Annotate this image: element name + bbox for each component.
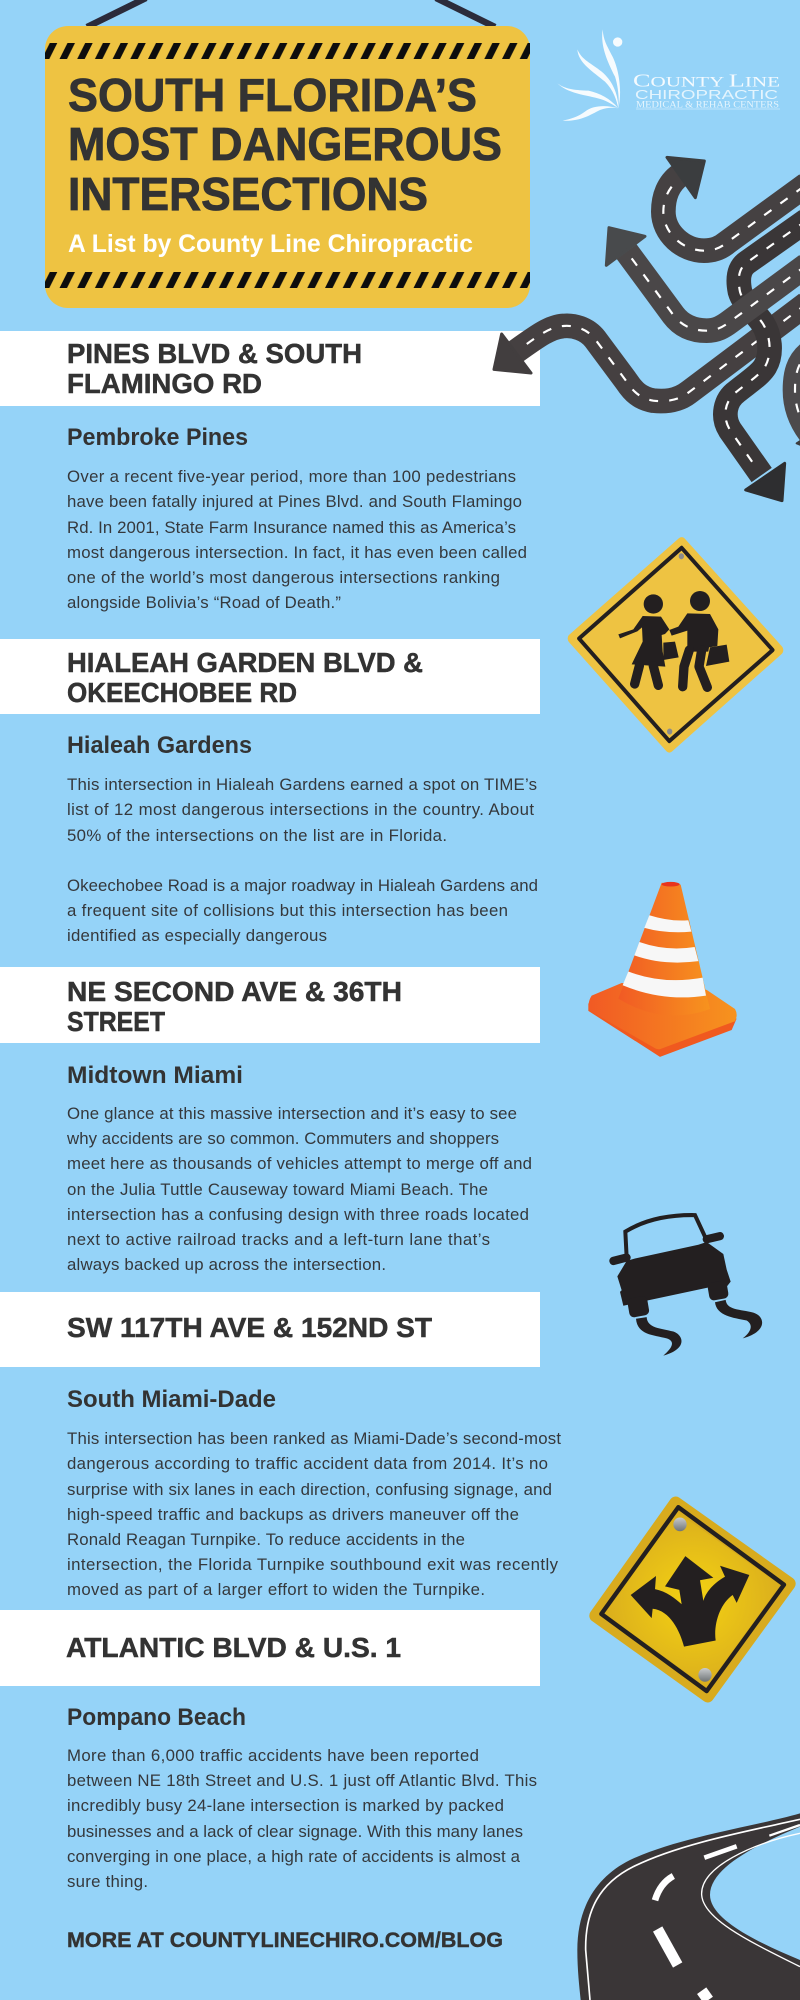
body text: have been fatally injured at Pines Blvd. and South Flamingo: [67, 492, 522, 511]
body text: intersection, the Florida Turnpike southbound exit was recently: [67, 1555, 559, 1574]
call to action: MORE AT COUNTYLINECHIRO.COM/BLOG: [67, 1928, 503, 1952]
icon: three-way arrow sign: [596, 1503, 789, 1696]
body text: sure thing.: [67, 1872, 148, 1891]
body text: [67, 1746, 537, 1891]
title: [68, 69, 502, 220]
road to far right: [795, 350, 800, 446]
body text: list of 12 most dangerous intersections in the country. About: [67, 800, 534, 819]
road with down arrow: [725, 220, 800, 501]
body text: dangerous according to traffic accident data from 2014. It’s no: [67, 1454, 548, 1473]
heading band: [0, 1610, 540, 1686]
logo: County Line Chiropractic: C OUNTY L INE: [633, 71, 780, 91]
body text: why accidents are so common. Commuters and shoppers: [66, 1129, 499, 1148]
road with left arrow: [494, 304, 800, 401]
heading band: [0, 967, 540, 1043]
city: Midtown Miami: [67, 1062, 243, 1089]
hanging sign straps: [87, 0, 495, 27]
icon: traffic cone: [588, 882, 737, 1057]
body text: identified as especially dangerous: [67, 926, 327, 945]
body text: businesses and a lack of clear signage. With this many lanes: [67, 1822, 523, 1841]
section 1: Pines Blvd: [0, 331, 540, 612]
body text: [67, 467, 527, 612]
heading: FLAMINGO RD: [67, 368, 262, 399]
heading: OKEECHOBEE RD: [67, 677, 297, 708]
body text: 50% of the intersections on the list are in Florida.: [67, 826, 447, 845]
body text: always backed up across the intersection.: [67, 1255, 386, 1274]
subtitle: A List by County Line Chiropractic: [68, 230, 473, 258]
title sign: [45, 26, 530, 308]
body text: Ronald Reagan Turnpike. To reduce accidents in the: [67, 1530, 465, 1549]
heading: ATLANTIC BLVD & U.S. 1: [66, 1632, 401, 1663]
body text: Over a recent five-year period, more than 100 pedestrians: [67, 467, 516, 486]
icon: school crossing sign: [572, 542, 779, 748]
title: MOST DANGEROUS: [68, 118, 502, 170]
body text: More than 6,000 traffic accidents have been reported: [67, 1746, 479, 1765]
logo: County Line Chiropractic: CHIROPRACTIC: [635, 88, 778, 102]
body text: a frequent site of collisions but this intersection has been: [67, 901, 508, 920]
body text: alongside Bolivia’s “Road of Death.”: [67, 593, 341, 612]
body text: high-speed traffic and backups as drivers maneuver off the: [67, 1505, 519, 1524]
body text: between NE 18th Street and U.S. 1 just off Atlantic Blvd. This: [67, 1771, 537, 1790]
title: SOUTH FLORIDA’S: [68, 69, 477, 121]
road with U-turn arrow: [663, 157, 800, 251]
heading: NE SECOND AVE & 36TH: [67, 976, 402, 1007]
section 5: Pompano Beach: [0, 1610, 540, 1891]
city: Pompano Beach: [67, 1704, 246, 1731]
body text: most dangerous intersection. In fact, it has even been called: [67, 543, 527, 562]
heading: STREET: [67, 1006, 165, 1037]
city: Hialeah Gardens: [67, 732, 252, 759]
heading: PINES BLVD & SOUTH: [67, 338, 362, 369]
body text: converging in one place, a high rate of accidents is almost a: [67, 1847, 521, 1866]
body text: This intersection in Hialeah Gardens earned a spot on TIME’s: [67, 775, 537, 794]
heading band: [0, 1292, 540, 1367]
body text: [67, 775, 538, 945]
body text: surprise with six lanes in each direction, confusing signage, and: [67, 1480, 552, 1499]
body text: incredibly busy 24-lane intersection is marked by packed: [67, 1796, 504, 1815]
heading: [67, 338, 362, 399]
body text: one of the world’s most dangerous intersections ranking: [67, 568, 500, 587]
logo: County Line Chiropractic: MEDICAL & REHAB CENTERS: [636, 99, 779, 109]
body text: intersection has a confusing design with three roads located: [67, 1205, 529, 1224]
body text: One glance at this massive intersection and it’s easy to see: [67, 1104, 517, 1123]
city: Pembroke Pines: [67, 424, 248, 451]
icon: tangled road arrows: [494, 157, 800, 501]
heading: [67, 647, 423, 708]
body text: Okeechobee Road is a major roadway in Hialeah Gardens and: [67, 876, 538, 895]
heading: SW 117TH AVE & 152ND ST: [67, 1312, 432, 1343]
body text: [67, 1429, 561, 1599]
body text: moved as part of a larger effort to widen the Turnpike.: [67, 1580, 485, 1599]
title: INTERSECTIONS: [68, 168, 428, 220]
city: South Miami-Dade: [67, 1386, 276, 1413]
heading band: [0, 639, 540, 714]
section 4: South Miami-Dade: [0, 1292, 561, 1599]
body text: This intersection has been ranked as Miami-Dade’s second-most: [67, 1429, 561, 1448]
section 3: Midtown Miami: [0, 967, 540, 1274]
body text: next to active railroad tracks and a left-turn lane that’s: [67, 1230, 490, 1249]
road with upper-left arrow: [606, 228, 800, 331]
heading: HIALEAH GARDEN BLVD &: [67, 647, 423, 678]
heading: [67, 976, 402, 1037]
logo: County Line Chiropractic: [557, 29, 780, 121]
body text: meet here as thousands of vehicles attempt to merge off and: [67, 1154, 532, 1173]
heading band: [0, 331, 540, 406]
body text: on the Julia Tuttle Causeway toward Miami Beach. The: [67, 1180, 488, 1199]
icon: curved highway: [577, 1813, 800, 2000]
section 2: Hialeah Gardens: [0, 639, 540, 945]
icon: skidding car: [613, 1215, 762, 1356]
body text: [66, 1104, 532, 1274]
body text: Rd. In 2001, State Farm Insurance named this as America’s: [67, 518, 516, 537]
